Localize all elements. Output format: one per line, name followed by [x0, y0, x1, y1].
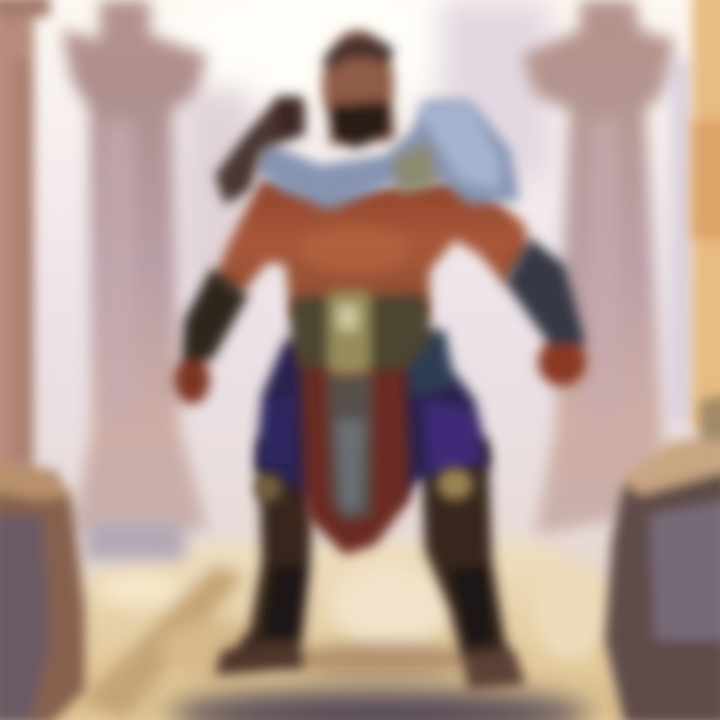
warrior: purple skirt	[255, 330, 490, 500]
warrior: belt	[290, 290, 432, 375]
warrior: knee guards	[254, 468, 473, 502]
right column	[522, 0, 692, 535]
far right orange column	[690, 0, 720, 430]
left column	[62, 0, 208, 560]
warrior: dark left pauldron	[215, 95, 305, 205]
ground	[40, 540, 640, 720]
warrior: ground shadow	[170, 690, 590, 720]
warrior: right leg and boot	[420, 440, 525, 690]
warrior: head and beard	[322, 30, 395, 148]
right foreground pot	[605, 395, 720, 720]
far left column	[0, 0, 50, 480]
warrior: left forearm and hand	[174, 268, 248, 404]
warrior: blue-grey shoulder armour	[255, 100, 520, 210]
warrior: right forearm and hand	[505, 238, 586, 386]
left foreground pot	[0, 462, 85, 720]
warrior: red-brown loincloth	[300, 345, 410, 555]
warrior figure	[170, 30, 590, 720]
warrior: left leg and boot	[215, 440, 315, 675]
warrior: bare torso and upper arms	[212, 178, 530, 320]
